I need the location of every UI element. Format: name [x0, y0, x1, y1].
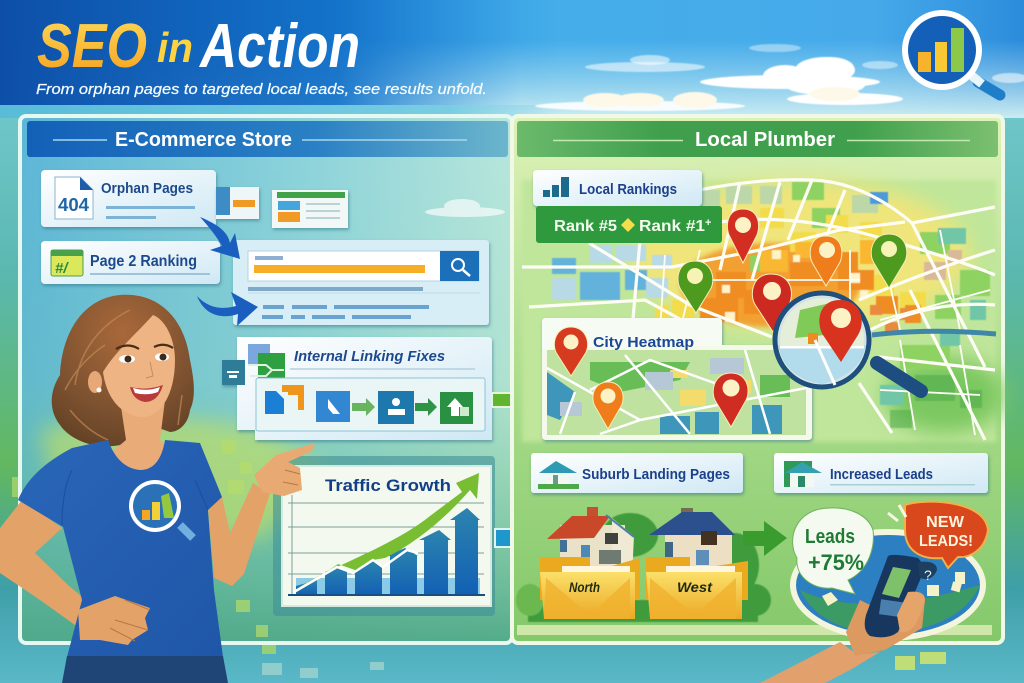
folder: west: West	[677, 579, 713, 595]
smile	[130, 385, 163, 402]
card: city heatmap	[542, 318, 812, 440]
pin	[871, 234, 907, 288]
pin	[554, 327, 588, 376]
magnifier	[775, 293, 921, 391]
pin	[678, 261, 713, 313]
card: suburb landing pages: Suburb Landing Pages	[582, 467, 730, 483]
hand with phone	[760, 555, 937, 683]
icon: 404 document: 404	[58, 195, 89, 215]
ear	[88, 371, 102, 393]
arrow: blue to local	[495, 519, 541, 557]
card: increased leads	[774, 453, 988, 493]
subtitle: From orphan pages to targeted local leads, see results unfold.	[36, 81, 487, 98]
rank badge: Rank #5	[554, 218, 617, 235]
icon: house	[538, 461, 579, 489]
arrow: ranking to results	[197, 292, 258, 326]
house: west	[649, 508, 735, 570]
card: internal linking fixes	[222, 337, 492, 440]
house: north	[547, 507, 634, 576]
callout: new leads: NEW	[926, 514, 964, 531]
card: internal linking fixes: Internal Linking Fixes	[294, 349, 445, 365]
phone: ?	[924, 567, 932, 583]
callout: leads +75%: Leads	[805, 526, 855, 548]
icon: ranking	[51, 250, 83, 277]
icon: ranking: #/	[55, 260, 69, 277]
card: suburb landing pages	[531, 453, 743, 493]
arm	[760, 642, 880, 683]
jeans	[62, 656, 228, 683]
title	[37, 12, 360, 81]
icon: search	[440, 251, 479, 281]
heading: e-commerce store: E-Commerce Store	[115, 129, 292, 151]
phone	[865, 555, 937, 637]
pin	[752, 274, 791, 332]
heading: e-commerce store	[27, 121, 508, 157]
hair strands	[65, 310, 182, 440]
panel: e-commerce store	[20, 116, 541, 643]
icon: logo magnifier with bars	[902, 10, 1000, 95]
pin: magnified	[819, 300, 862, 362]
arrow: to leads	[743, 521, 787, 556]
card: page 2 ranking	[41, 241, 220, 284]
card: orphan pages: Orphan Pages	[101, 181, 193, 197]
heading: local plumber: Local Plumber	[695, 129, 835, 151]
callout: new leads	[888, 502, 988, 568]
callout: new leads: LEADS!	[919, 533, 973, 550]
title: in	[157, 24, 193, 71]
river	[872, 331, 996, 335]
shirt	[18, 440, 223, 657]
heading: local plumber	[517, 121, 998, 157]
icon: house green	[784, 461, 822, 487]
folder: north: North	[569, 579, 600, 595]
eyes	[116, 345, 173, 363]
folder: west	[646, 557, 748, 619]
card: local rankings	[533, 170, 702, 206]
rank badge: Rank #1	[639, 218, 705, 235]
chart: growth arrow	[295, 473, 479, 590]
callout: leads +75%	[793, 508, 873, 594]
card: city heatmap: City Heatmap	[593, 334, 694, 351]
chart: bars	[296, 508, 480, 595]
panel: local plumber	[512, 116, 1005, 643]
icon: bars	[543, 177, 569, 197]
arrow: orphan to search	[200, 217, 240, 259]
sky clouds	[535, 44, 1024, 111]
hair back	[52, 295, 194, 446]
arrow: green to local	[492, 384, 537, 416]
folder: north	[540, 557, 640, 619]
callout: leads +75%: +75%	[808, 550, 864, 575]
left arm	[0, 500, 92, 630]
hand on hip	[78, 596, 150, 645]
title: SEO	[37, 12, 147, 81]
right arm	[208, 483, 270, 586]
card: local rankings: Local Rankings	[579, 182, 677, 198]
pointing hand	[254, 443, 315, 496]
title: Action	[198, 12, 360, 81]
person	[0, 295, 315, 683]
card: page 2 ranking: Page 2 Ranking	[90, 253, 197, 270]
lead pond	[790, 529, 986, 641]
orphan page thumbnails	[216, 187, 348, 228]
rank badge	[536, 206, 722, 243]
pin	[727, 209, 759, 263]
icon: 404 document	[55, 177, 93, 219]
face	[103, 315, 175, 417]
link icons	[222, 344, 285, 385]
card: traffic growth chart	[273, 456, 495, 616]
card: traffic growth chart: Traffic Growth	[325, 476, 451, 495]
card: increased leads: Increased Leads	[830, 467, 933, 483]
cloud	[425, 199, 505, 217]
map pins	[554, 209, 907, 429]
earring	[96, 388, 102, 392]
roads	[522, 180, 995, 440]
rank badge: +	[705, 217, 711, 229]
map	[522, 180, 1005, 442]
card: search results	[233, 240, 489, 325]
pin	[593, 382, 623, 429]
pixel squares	[222, 440, 268, 637]
neck	[112, 400, 172, 472]
pin	[713, 373, 748, 427]
bushes	[516, 513, 771, 622]
fingers	[897, 592, 925, 632]
card: orphan pages	[41, 170, 216, 227]
map blocks	[552, 182, 990, 428]
pin	[810, 236, 842, 286]
nose	[146, 362, 153, 378]
icon row	[265, 385, 473, 424]
shirt logo	[129, 480, 193, 538]
